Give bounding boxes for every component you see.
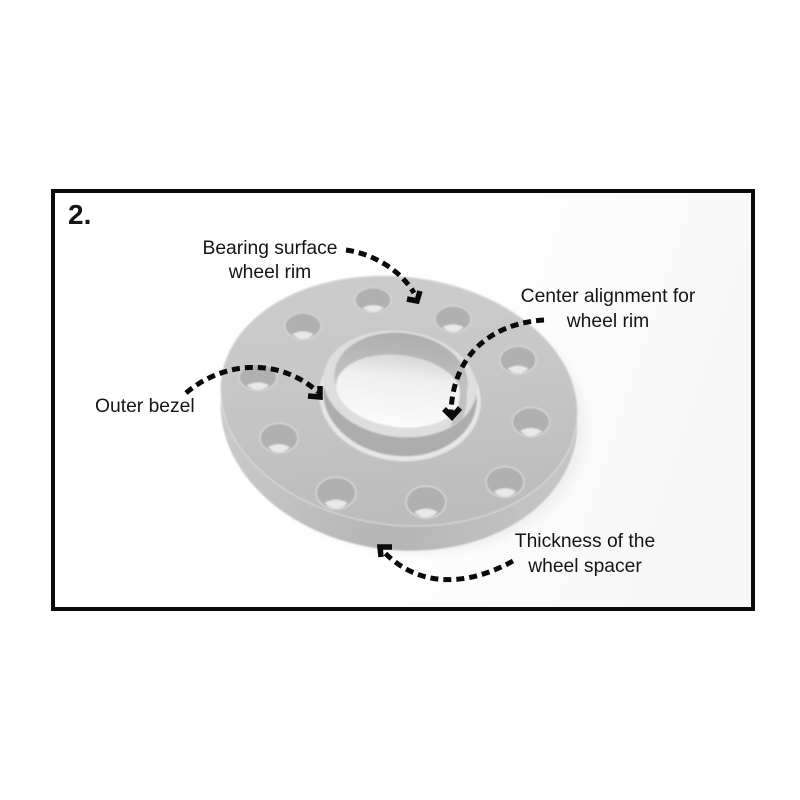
center hub <box>312 322 488 470</box>
label: center alignment: Center alignment for <box>521 286 696 307</box>
label: thickness: Thickness of the <box>515 531 655 552</box>
label: bearing surface wheel rim <box>202 238 338 283</box>
label: bearing surface wheel rim: Bearing surface <box>202 238 338 259</box>
disc shadow <box>219 268 601 572</box>
label: thickness: wheel spacer <box>527 556 642 577</box>
label: center alignment <box>521 286 696 332</box>
arrow: center alignment <box>444 320 544 417</box>
disc edge thickness <box>205 257 593 571</box>
arrow: outer bezel <box>186 367 320 397</box>
image: wheel spacer disc <box>205 256 601 572</box>
panel: framed picture <box>53 191 753 609</box>
label: thickness <box>515 531 655 577</box>
arrow: thickness <box>380 547 513 580</box>
arrow: bearing surface <box>346 250 420 301</box>
label: bearing surface wheel rim: wheel rim <box>228 262 311 283</box>
bolt holes <box>239 288 550 518</box>
disc top face <box>206 256 592 546</box>
label: step number: 2. <box>68 199 91 230</box>
label: outer bezel: Outer bezel <box>95 396 195 417</box>
label: center alignment: wheel rim <box>566 311 649 332</box>
